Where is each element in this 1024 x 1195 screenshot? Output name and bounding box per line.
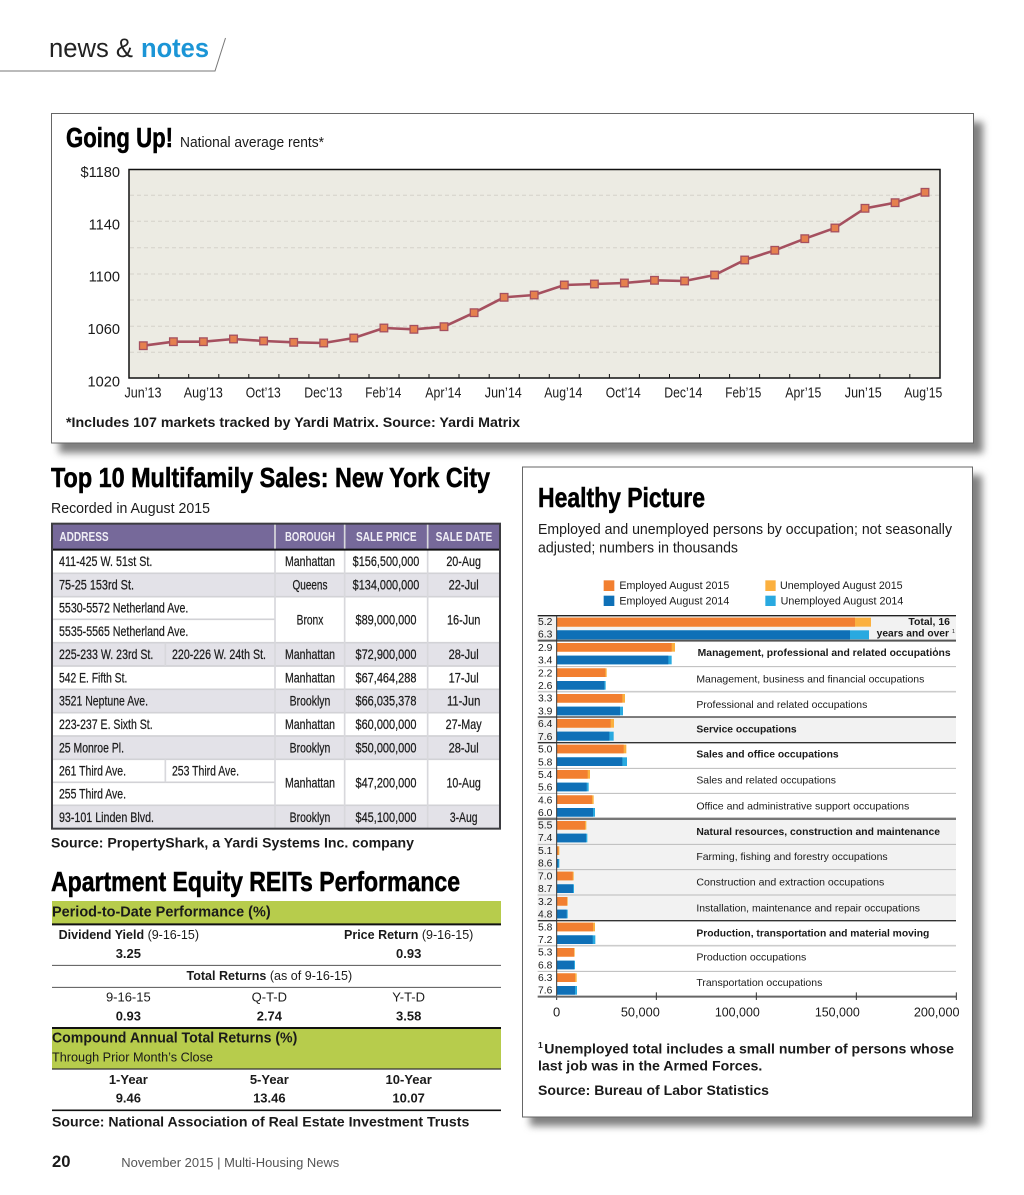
description (538, 522, 953, 557)
footnote and source: last job was in the Armed Forces. (538, 1059, 762, 1075)
occupation labels bottom: Transportation occupations (696, 978, 822, 989)
table addresses: 223-237 E. Sixth St. (59, 716, 153, 732)
x axis labels: Jun’13 (124, 386, 162, 402)
table boroughs: Manhattan (285, 646, 335, 662)
description: adjusted; numbers in thousands (538, 541, 738, 557)
occupation labels top: Sales and office occupations (696, 749, 839, 760)
compound returns values: 9.46 (116, 1091, 141, 1106)
unemployed bars 2015 bottom (557, 821, 595, 982)
occupation labels top: years and over (877, 629, 949, 640)
x axis labels: Dec’13 (304, 386, 342, 402)
table sale dates: 28-Jul (449, 739, 479, 755)
row shading (538, 616, 956, 743)
table addresses: 411-425 W. 51st St. (59, 553, 152, 569)
table sale dates: 11-Jun (447, 693, 480, 709)
percentage labels bottom: 6.8 (538, 960, 553, 971)
compound returns values (109, 1072, 432, 1106)
header: news and notes: notes (141, 33, 209, 63)
percentage labels top: 6.0 (538, 808, 553, 819)
y axis labels: 1140 (89, 217, 120, 233)
green band: compound annual: Compound Annual Total Returns (%) (52, 1031, 298, 1047)
dividend yield and price return: Price Return (9-16-15) (344, 927, 473, 942)
x axis labels: Dec’14 (664, 386, 702, 402)
green band: period-to-date: Period-to-Date Performance (%) (52, 905, 271, 921)
table sale prices (353, 553, 420, 825)
table boroughs: Manhattan (285, 669, 335, 685)
y axis labels: $1180 (80, 165, 120, 181)
chart axis: 200,000 (914, 1005, 959, 1020)
table sale dates: 22-Jul (449, 576, 479, 592)
heading: top 10 multifamily sales: Top 10 Multifamily Sales: New York City (51, 462, 490, 493)
percentage labels top: 3.9 (538, 706, 553, 717)
footnote and source: Unemployed total includes a small number of persons whose (544, 1041, 954, 1057)
occupation labels top: 1 (934, 646, 937, 651)
green band: compound annual (52, 1029, 501, 1069)
chart footnote: *Includes 107 markets tracked by Yardi Matrix. Source: Yardi Matrix (66, 415, 520, 431)
table boroughs: Manhattan (285, 553, 335, 569)
green band: period-to-date (52, 901, 501, 924)
chart axis: 0 (553, 1005, 560, 1020)
occupation labels top: Professional and related occupations (696, 700, 867, 711)
dividend yield and price return: 0.93 (396, 946, 421, 961)
table sale prices: $60,000,000 (355, 716, 417, 732)
legend: Employed August 2015 (619, 580, 729, 592)
row shading (538, 819, 956, 921)
table sale dates: 16-Jun (447, 611, 480, 627)
occupation labels top: Management, business and financial occupations (696, 674, 924, 685)
dividend yield and price return: Dividend Yield (9-16-15) (59, 927, 199, 942)
percentage labels bottom: 5.1 (538, 846, 553, 857)
table sale dates: 27-May (446, 716, 482, 732)
compound returns values: 10-Year (386, 1072, 432, 1087)
table boroughs: Bronx (297, 611, 323, 627)
legend: Unemployed August 2015 (780, 580, 903, 592)
line chart plot (129, 170, 940, 378)
table sale prices: $67,464,288 (355, 669, 417, 685)
employed bars 2014 top (557, 630, 850, 817)
table addresses: 5530-5572 Netherland Ave. (59, 600, 188, 616)
percentage labels top: 2.2 (538, 668, 553, 679)
chart axis: 150,000 (815, 1005, 860, 1020)
occupation labels top: Management, professional and related occupations (698, 648, 951, 659)
occupation labels bottom: Construction and extraction occupations (696, 877, 884, 888)
percentage labels bottom: 6.3 (538, 973, 553, 984)
heading: going up: Going Up! (66, 122, 173, 153)
x axis labels: Jun’15 (845, 386, 882, 402)
chart axis (538, 616, 959, 1020)
percentage labels bottom: 7.6 (538, 986, 553, 997)
total returns: Y-T-D (392, 989, 425, 1004)
y axis labels (80, 165, 120, 390)
table sale prices: $45,100,000 (355, 809, 417, 825)
percentage labels top: 5.0 (538, 745, 553, 756)
table sale dates: 10-Aug (446, 774, 481, 790)
table header (59, 529, 493, 544)
table addresses: 261 Third Ave. (59, 762, 126, 778)
header: news and notes (0, 33, 226, 71)
total returns: 9-16-15 (106, 989, 151, 1004)
footnote and source: 1 (538, 1040, 543, 1050)
table addresses: 542 E. Fifth St. (59, 669, 127, 685)
x axis labels: Jun’14 (485, 386, 522, 402)
percentage labels bottom: 7.2 (538, 935, 553, 946)
occupation labels top: Service occupations (696, 724, 797, 735)
table sale dates: 3-Aug (450, 809, 477, 825)
percentage labels top: 5.4 (538, 770, 553, 781)
occupation labels top: Office and administrative support occupations (696, 801, 909, 812)
bar chart upper part with legend (538, 580, 956, 827)
table: top 10 sales (52, 524, 500, 829)
x axis labels (124, 386, 942, 402)
percentage labels bottom: 8.6 (538, 859, 553, 870)
total returns: 0.93 (116, 1009, 141, 1024)
panel: going up rents chart (52, 114, 983, 453)
occupation labels bottom: Installation, maintenance and repair occupations (696, 903, 920, 914)
percentage labels bottom (538, 820, 553, 997)
percentage labels bottom: 3.2 (538, 897, 553, 908)
x axis labels: Apr’15 (785, 386, 821, 402)
dividend yield and price return (59, 927, 473, 961)
occupation labels top: Total, 16 (908, 617, 950, 628)
table boroughs: Manhattan (285, 774, 335, 790)
unemployed bars 2014 top (557, 630, 869, 817)
table addresses (59, 553, 266, 825)
x axis labels: Aug’13 (184, 386, 223, 402)
table header: SALE PRICE (356, 529, 417, 544)
occupation labels bottom: Farming, fishing and forestry occupations (696, 852, 888, 863)
table sale dates: 20-Aug (446, 553, 481, 569)
percentage labels top: 2.9 (538, 643, 553, 654)
table addresses: 3521 Neptune Ave. (59, 693, 148, 709)
table sale prices: $72,900,000 (355, 646, 417, 662)
table sale dates: 28-Jul (449, 646, 479, 662)
subtitle: national average rents: National average rents* (180, 135, 324, 151)
x axis labels: Oct’14 (606, 386, 641, 402)
reits source note: Source: National Association of Real Estate Investment Trusts (52, 1114, 470, 1130)
green band: compound annual: Through Prior Month’s Close (52, 1049, 213, 1064)
occupation labels bottom: Production occupations (696, 953, 806, 964)
rent line (143, 192, 925, 346)
total returns (106, 968, 425, 1024)
employed bars 2015 top (557, 618, 855, 804)
occupation labels bottom: Production, transportation and material moving (696, 929, 929, 940)
table header: ADDRESS (59, 529, 109, 544)
footnote and source (538, 1040, 954, 1099)
y axis labels: 1060 (88, 322, 120, 338)
occupation labels bottom (696, 827, 940, 989)
compound returns values: 1-Year (109, 1072, 148, 1087)
table addresses: 25 Monroe Pl. (59, 739, 124, 755)
table boroughs: Queens (292, 576, 327, 592)
occupation labels bottom: Natural resources, construction and maintenance (696, 827, 940, 838)
unemployed bars 2014 bottom (557, 834, 595, 995)
employed bars 2015 bottom (557, 821, 593, 982)
table sale prices: $134,000,000 (353, 576, 420, 592)
heading: healthy picture: Healthy Picture (538, 482, 705, 513)
panel: healthy picture (522, 467, 982, 1126)
x axis labels: Aug’15 (904, 386, 942, 402)
table sale dates: 17-Jul (449, 669, 479, 685)
percentage labels top: 3.3 (538, 694, 553, 705)
percentage labels bottom: 7.4 (538, 833, 553, 844)
header: news and notes: news & (49, 33, 133, 63)
table boroughs: Brooklyn (290, 693, 330, 709)
total returns: 2.74 (257, 1009, 283, 1024)
occupation labels top: 1 (952, 629, 955, 635)
x axis labels: Feb’15 (725, 386, 761, 402)
table source note: Source: PropertyShark, a Yardi Systems Inc. company (51, 836, 414, 852)
chart axis: 100,000 (715, 1005, 760, 1020)
x axis labels: Apr’14 (425, 386, 461, 402)
table header: SALE DATE (436, 529, 493, 544)
dividend yield and price return: 3.25 (116, 946, 141, 961)
page number: 20 (52, 1153, 70, 1171)
table addresses: 93-101 Linden Blvd. (59, 809, 154, 825)
percentage labels top: 5.8 (538, 757, 553, 768)
x axis labels: Aug’14 (544, 386, 582, 402)
table sale prices: $66,035,378 (355, 693, 417, 709)
total returns: 3.58 (396, 1009, 421, 1024)
percentage labels bottom: 5.3 (538, 948, 553, 959)
table sale prices: $156,500,000 (353, 553, 420, 569)
data point markers (140, 188, 929, 350)
percentage labels top: 3.4 (538, 656, 553, 667)
percentage labels top: 5.6 (538, 783, 553, 794)
percentage labels top (538, 617, 553, 819)
description: Employed and unemployed persons by occupation; not seasonally (538, 522, 953, 538)
table addresses: 220-226 W. 24th St. (172, 646, 266, 662)
table addresses: 75-25 153rd St. (59, 576, 134, 592)
percentage labels bottom: 4.8 (538, 910, 553, 921)
bar chart lower part with axis (538, 616, 959, 1020)
subheading: recorded in august 2015: Recorded in August 2015 (51, 501, 210, 517)
unemployed bars top (557, 618, 871, 804)
percentage labels top: 5.2 (538, 617, 553, 628)
table addresses: 225-233 W. 23rd St. (59, 646, 153, 662)
table sale dates (446, 553, 482, 825)
percentage labels bottom: 8.7 (538, 884, 553, 895)
table header: BOROUGH (285, 529, 335, 544)
footer publication line: November 2015 | Multi-Housing News (121, 1155, 340, 1170)
table boroughs: Brooklyn (290, 809, 330, 825)
legend: Employed August 2014 (619, 595, 729, 607)
percentage labels bottom: 5.8 (538, 922, 553, 933)
compound returns values: 10.07 (392, 1091, 425, 1106)
compound returns values: 5-Year (250, 1072, 289, 1087)
percentage labels bottom: 5.5 (538, 820, 553, 831)
total returns: Total Returns (as of 9-16-15) (186, 968, 352, 983)
table: reits performance (52, 901, 501, 1130)
x axis labels: Oct’13 (246, 386, 281, 402)
occupation labels top: Sales and related occupations (696, 775, 836, 786)
table sale prices: $50,000,000 (355, 739, 417, 755)
percentage labels top: 6.3 (538, 630, 553, 641)
compound returns values: 13.46 (253, 1091, 286, 1106)
y axis labels: 1020 (88, 374, 120, 390)
table addresses: 5535-5565 Netherland Ave. (59, 623, 188, 639)
table boroughs (285, 553, 335, 825)
total returns: Q-T-D (252, 989, 287, 1004)
x axis labels: Feb’14 (365, 386, 401, 402)
percentage labels top: 4.6 (538, 795, 553, 806)
table sale prices: $47,200,000 (355, 774, 417, 790)
footnote and source: Source: Bureau of Labor Statistics (538, 1083, 769, 1099)
y axis labels: 1100 (89, 270, 120, 286)
table sale prices: $89,000,000 (355, 611, 417, 627)
legend: Unemployed August 2014 (781, 596, 903, 608)
employed bars 2014 bottom (557, 834, 593, 995)
table boroughs: Brooklyn (290, 739, 330, 755)
chart axis: 50,000 (621, 1005, 660, 1020)
heading: apartment equity reits performance: Apartment Equity REITs Performance (51, 866, 460, 897)
table boroughs: Manhattan (285, 716, 335, 732)
legend (604, 580, 903, 608)
occupation labels top (696, 617, 955, 812)
percentage labels top: 7.6 (538, 732, 553, 743)
percentage labels top: 2.6 (538, 681, 553, 692)
table addresses: 255 Third Ave. (59, 786, 126, 802)
percentage labels top: 6.4 (538, 719, 553, 730)
table addresses: 253 Third Ave. (172, 762, 239, 778)
percentage labels bottom: 7.0 (538, 871, 553, 882)
